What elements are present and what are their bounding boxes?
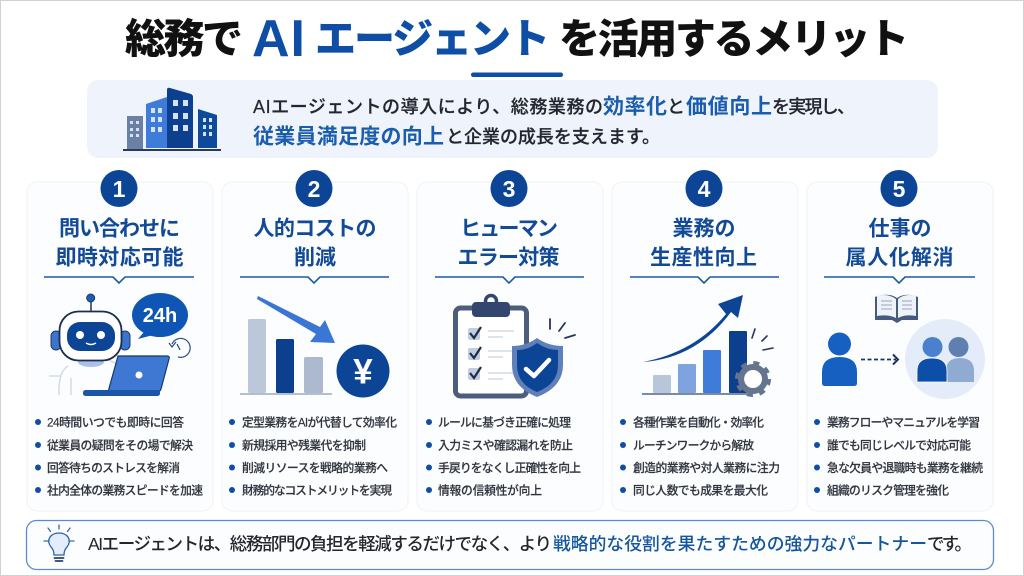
icon: yen coin (336, 344, 390, 398)
bullet list 4: 創造的業務や対人業務に注力 (633, 461, 780, 475)
bullet list 3: ルールに基づき正確に処理 (438, 416, 571, 430)
bullet list 5: 急な欠員や退職時も業務を継続 (827, 461, 983, 475)
panel: intro (87, 80, 938, 158)
bullet list 2: 新規採用や残業代を抑制 (242, 438, 366, 452)
panel: card 1 (27, 170, 213, 511)
intro text: AIエージェントの導入により、総務業務の (253, 97, 603, 117)
bar chart falling (240, 319, 332, 395)
bullet list 1: 24時間いつでも即時に回答 (47, 416, 184, 430)
heading 5 (846, 216, 954, 270)
conclusion text: 戦略的な役割を果たすための強力なパートナー (553, 534, 927, 554)
bullet list 4: 同じ人数でも成果を最大化 (633, 484, 768, 498)
icon: gear (737, 329, 773, 395)
title (125, 10, 909, 68)
icon: robot with laptop: 24h (143, 305, 177, 327)
bullet list 5 (814, 416, 983, 498)
dashed arrow (861, 354, 898, 364)
title: エージェント (315, 16, 550, 62)
heading 4: 生産性向上 (650, 246, 757, 270)
bullet list 2 (229, 416, 397, 498)
title: 総務で (125, 16, 243, 62)
number badge 2: 2 (308, 176, 320, 202)
number badge 4: 4 (698, 176, 711, 202)
icon: shield check (512, 319, 575, 397)
title: を活用するメリット (559, 16, 909, 62)
heading 1 (56, 218, 184, 270)
intro text: 従業員満足度の向上 (253, 126, 444, 148)
number badge 5: 5 (893, 176, 906, 202)
intro text: と企業の成長を支えます。 (446, 127, 660, 147)
bar chart rising (642, 331, 747, 395)
intro text (253, 96, 855, 148)
number badge 2 (296, 170, 332, 207)
bullet list 2: 定型業務をAIが代替して効率化 (242, 416, 397, 430)
icon: team circle (905, 319, 985, 399)
icon: single person (822, 332, 857, 386)
heading 2: 削減 (294, 246, 336, 270)
icon: open book (875, 295, 918, 323)
icon: yen coin: ¥ (353, 352, 373, 392)
panel: card 4 (612, 170, 798, 511)
bullet list 1 (35, 416, 203, 498)
panel: conclusion callout (26, 520, 994, 570)
bullet list 5: 誰でも同じレベルで対応可能 (827, 438, 971, 452)
panel: card 2 (222, 170, 408, 511)
heading 3: エラー対策 (458, 246, 560, 270)
heading 1: 即時対応可能 (56, 246, 184, 270)
intro text: 価値向上 (686, 96, 772, 118)
bullet list 1: 回答待ちのストレスを解消 (47, 461, 180, 475)
heading 5: 仕事の (868, 216, 932, 240)
title: AI (252, 10, 305, 68)
number badge 5 (880, 170, 918, 207)
icon: office buildings (123, 88, 221, 151)
icon: robot with laptop (49, 293, 190, 396)
bullet list 4: 各種作業を自動化・効率化 (633, 416, 764, 430)
bullet list 2: 財務的なコストメリットを実現 (242, 484, 392, 498)
heading 3: ヒューマン (460, 218, 558, 240)
heading 2: 人的コストの (254, 218, 376, 240)
panel: card 5 (807, 170, 993, 511)
number badge 4 (686, 170, 722, 207)
number badge 3 (490, 170, 528, 207)
title underline (471, 72, 563, 77)
bullet list 4: ルーチンワークから解放 (633, 438, 754, 452)
intro text: を実現し、 (772, 97, 855, 117)
bullet list 3: 情報の信頼性が向上 (438, 484, 542, 498)
icon: light bulb (44, 525, 74, 561)
heading 1: 問い合わせに (59, 218, 180, 240)
heading 4: 業務の (672, 218, 736, 240)
bullet list 1: 従業員の疑問をその場で解決 (47, 438, 193, 452)
panel: card 3 (417, 170, 603, 511)
heading 3 (458, 218, 560, 270)
bullet list 5: 組織のリスク管理を強化 (827, 484, 949, 498)
number badge 1: 1 (113, 176, 126, 202)
bullet list 4 (620, 416, 780, 498)
heading 5: 属人化解消 (846, 246, 954, 270)
heading 4 (650, 218, 757, 270)
icon: clipboard checklist (456, 296, 526, 396)
bullet list 2: 削減リソースを戦略的業務へ (242, 461, 388, 475)
bullet list 3: 入力ミスや確認漏れを防止 (438, 438, 573, 452)
bullet list 1: 社内全体の業務スピードを加速 (47, 484, 203, 498)
heading 2 (254, 218, 376, 270)
bullet list 5: 業務フローやマニュアルを学習 (827, 416, 980, 430)
bullet list 3 (426, 416, 581, 498)
bullet list 3: 手戻りをなくし正確性を向上 (438, 461, 581, 475)
arrow down (257, 296, 335, 343)
intro text: 効率化 (603, 96, 667, 118)
number badge 1 (100, 170, 138, 207)
conclusion text (88, 534, 972, 554)
intro text: と (667, 97, 685, 117)
conclusion text: です。 (927, 534, 972, 554)
conclusion text: AIエージェントは、総務部門の負担を軽減するだけでなく、より (88, 534, 552, 554)
number badge 3: 3 (503, 176, 515, 202)
arrow up (643, 295, 743, 362)
